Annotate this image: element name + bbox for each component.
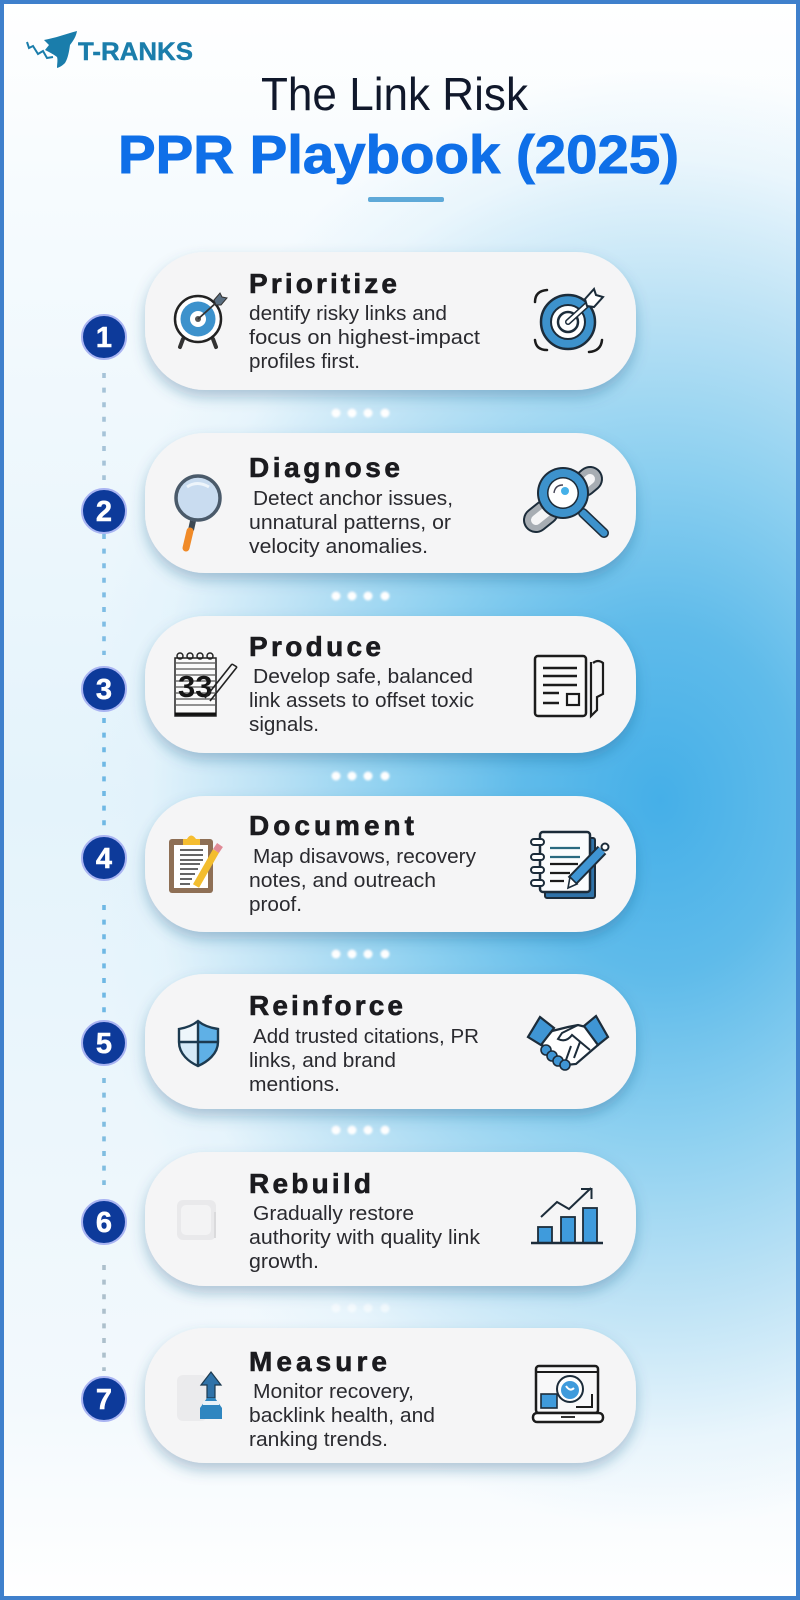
description 1: [249, 303, 480, 373]
description 1: dentify risky links and: [249, 303, 447, 325]
description 7: backlink health, and: [249, 1405, 435, 1427]
number badge 5: [82, 1021, 126, 1065]
description 5: Add trusted citations, PR: [253, 1026, 479, 1048]
card 4: [145, 796, 636, 932]
description 4: proof.: [249, 894, 302, 916]
number badge 7: 7: [96, 1384, 112, 1416]
heading: Rebuild: Rebuild: [249, 1168, 371, 1199]
heading: Produce: Produce: [249, 631, 381, 662]
description 5: mentions.: [249, 1074, 340, 1096]
description 3: [249, 666, 474, 736]
description 7: Monitor recovery,: [253, 1381, 414, 1403]
icon: laptop dashboard: [533, 1366, 603, 1422]
icon: growth bar chart: [531, 1188, 603, 1243]
icon: notepad with pencil: [175, 653, 237, 716]
title underline: [368, 197, 444, 202]
description 3: Develop safe, balanced: [253, 666, 473, 688]
step 6: Rebuild: [82, 1152, 636, 1286]
step 3: Produce: [82, 616, 636, 753]
separator dots: [332, 408, 390, 1312]
description 6: [249, 1203, 481, 1273]
description 2: unnatural patterns, or: [249, 512, 451, 534]
icon: clipboard with pencil: [169, 836, 220, 893]
description 3: link assets to offset toxic: [249, 690, 474, 712]
number badge 2: [82, 489, 126, 533]
logo: T-RANKS: T-RANKS: [78, 38, 193, 66]
number badge 4: 4: [96, 843, 112, 875]
icon: handshake: [528, 1016, 608, 1070]
description 4: [249, 846, 476, 916]
number badge 6: 6: [96, 1207, 112, 1239]
number badge 4: [82, 836, 126, 880]
icon: document and pen: [535, 656, 603, 716]
card 5: [145, 974, 636, 1109]
heading: Reinforce: Reinforce: [249, 990, 403, 1021]
number badge 1: 1: [96, 322, 112, 354]
description 3: signals.: [249, 714, 319, 736]
card 1: [145, 252, 636, 390]
card 7: [145, 1328, 636, 1463]
card 2: [145, 433, 636, 573]
heading: Measure: Measure: [249, 1346, 387, 1377]
description 1: profiles first.: [249, 351, 360, 373]
number badge 3: 3: [96, 674, 112, 706]
number badge 2: 2: [96, 496, 112, 528]
description 7: [249, 1381, 435, 1451]
description 5: [249, 1026, 479, 1096]
number badge 7: [82, 1377, 126, 1421]
description 6: growth.: [249, 1251, 319, 1273]
step 4: Document: [82, 796, 636, 932]
description 1: focus on highest-impact: [249, 327, 480, 349]
step 2: Diagnose: [82, 433, 636, 573]
step 7: Measure: [82, 1328, 636, 1463]
number badge 1: [82, 315, 126, 359]
icon: faint placeholder square: [177, 1200, 216, 1240]
heading: Prioritize: Prioritize: [249, 268, 397, 299]
dotted timeline connector: [102, 373, 106, 1371]
description 4: notes, and outreach: [249, 870, 436, 892]
description 2: Detect anchor issues,: [253, 488, 453, 510]
description 7: ranking trends.: [249, 1429, 388, 1451]
icon: target with arrow right: [535, 289, 603, 352]
description 2: velocity anomalies.: [249, 536, 428, 558]
icon: magnifier over chain link: [536, 467, 604, 533]
logo: T-RANKS: [27, 31, 193, 68]
title: PPR Playbook (2025): PPR Playbook (2025): [118, 125, 679, 185]
step 5: Reinforce: [82, 974, 636, 1109]
heading: Document: Document: [249, 810, 414, 841]
step 1: Prioritize: [82, 252, 636, 390]
icon: notepad with pencil: 33: [178, 669, 212, 704]
icon: shield: [179, 1021, 218, 1066]
description 6: Gradually restore: [253, 1203, 414, 1225]
description 2: [249, 488, 453, 558]
icon: target with arrow left: [175, 293, 227, 347]
number badge 5: 5: [96, 1028, 112, 1060]
description 5: links, and brand: [249, 1050, 396, 1072]
card 3: [145, 616, 636, 753]
icon: magnifying glass: [176, 476, 220, 548]
icon: notebook with pen: [531, 832, 608, 898]
icon: upward arrow on base: [177, 1372, 222, 1421]
heading: Diagnose: Diagnose: [249, 452, 400, 483]
card 6: [145, 1152, 636, 1286]
number badge 3: [82, 667, 126, 711]
number badge 6: [82, 1200, 126, 1244]
description 4: Map disavows, recovery: [253, 846, 476, 868]
description 6: authority with quality link: [249, 1227, 481, 1249]
title: The Link Risk: The Link Risk: [261, 68, 529, 120]
